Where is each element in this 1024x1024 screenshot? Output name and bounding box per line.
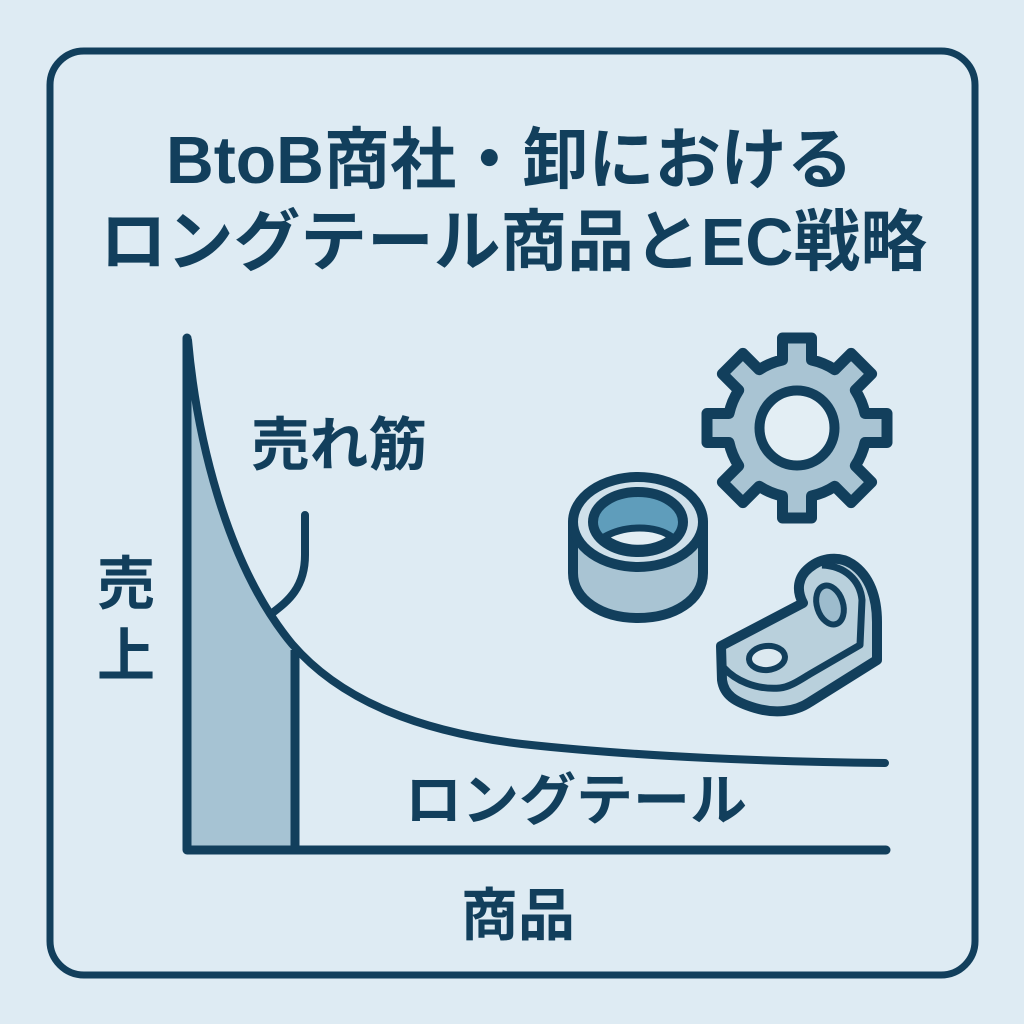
title: BtoB商社・卸における (166, 123, 853, 198)
title: ロングテール商品とEC戦略 (100, 205, 927, 280)
label: x axis products: 商品 (461, 884, 575, 948)
label: best sellers: 売れ筋 (251, 413, 427, 478)
chart: long tail sales curve (187, 338, 886, 850)
chart axes (187, 338, 886, 850)
divider: best sellers boundary (290, 650, 300, 850)
icon: bushing ring (573, 477, 703, 618)
chart curve (188, 340, 885, 763)
icon: gear (707, 338, 887, 518)
label: y axis sales (97, 552, 155, 689)
label: long tail: ロングテール (405, 769, 747, 832)
title (100, 123, 927, 280)
callout leader line (271, 515, 305, 614)
label: y axis sales: 上 (97, 624, 155, 689)
icon: angle bracket (721, 559, 877, 711)
label: y axis sales: 売 (97, 552, 155, 617)
chart area: best sellers shaded region (188, 345, 296, 850)
